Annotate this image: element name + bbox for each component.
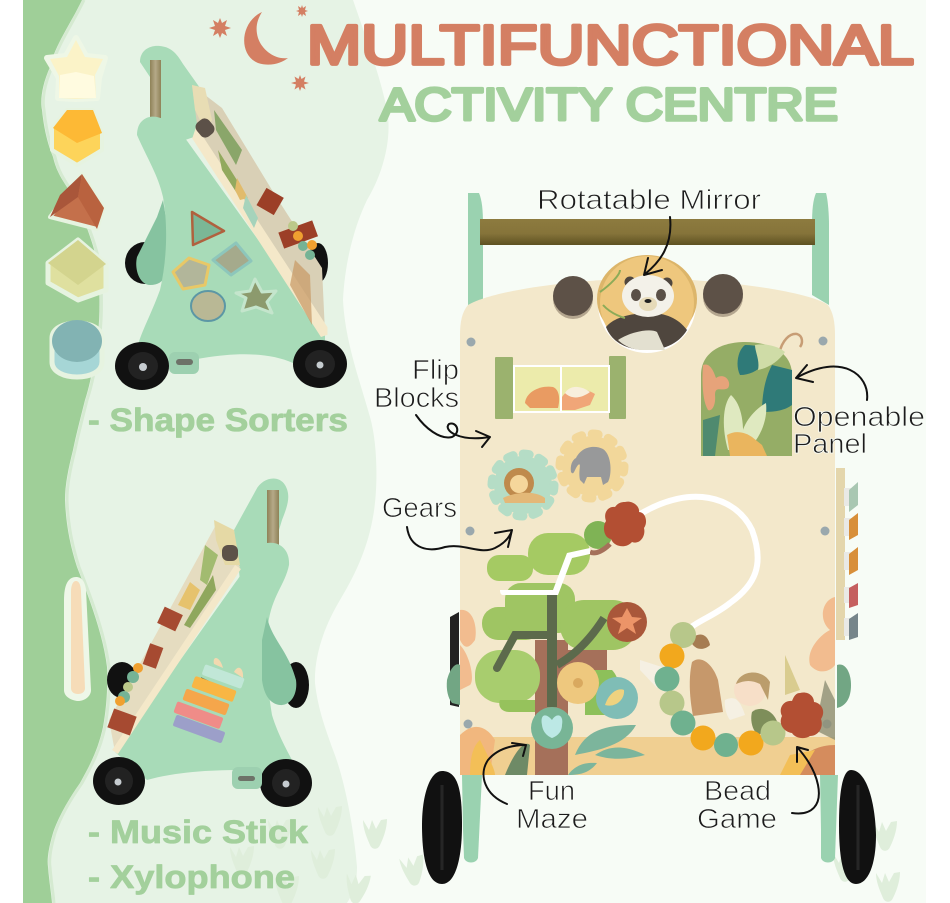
clasp	[169, 352, 199, 374]
background blob: pale green wave	[23, 0, 389, 903]
mirror knobs	[553, 274, 743, 319]
front wheels	[422, 770, 876, 884]
label: Bead Game	[697, 775, 777, 834]
gears	[492, 434, 624, 516]
rear leg	[136, 200, 168, 285]
label: Shape Sorters: - Shape Sorters	[88, 402, 348, 438]
toys on board	[214, 520, 240, 565]
clasp	[232, 767, 262, 789]
handle bar	[150, 60, 161, 118]
arrow: to gears	[407, 527, 512, 550]
arrow: to openable panel	[796, 365, 867, 400]
label: Fun Maze	[516, 775, 588, 834]
label: Bead Game: Game	[697, 803, 777, 834]
main frame	[115, 543, 293, 780]
label: Openable Panel: Panel	[793, 428, 867, 459]
sorter hole: square	[213, 243, 251, 275]
main frame	[137, 117, 325, 363]
board	[460, 278, 835, 775]
label: Gears: Gears	[382, 492, 457, 523]
bead game flower blocks	[604, 502, 823, 738]
screws	[464, 336, 832, 728]
label: Music Stick: - Music Stick	[88, 814, 308, 850]
icon: music stick	[64, 577, 91, 701]
label: Openable Panel: Openable	[793, 401, 925, 432]
label: Fun Maze: Maze	[516, 803, 588, 834]
footprints decoration	[230, 806, 900, 903]
title: Activity Centre: ACTIVITY CENTRE	[380, 79, 838, 130]
arrow: to flip blocks	[416, 415, 490, 447]
label: Flip Blocks	[374, 354, 459, 413]
bead game wire	[642, 497, 758, 628]
maze trees	[475, 521, 637, 775]
sorter hole: circle	[191, 291, 225, 321]
openable panel	[701, 334, 802, 456]
bead game beads	[654, 622, 786, 757]
leaves bottom	[568, 725, 645, 775]
label: Flip Blocks: Blocks	[374, 382, 459, 413]
xylophone	[173, 658, 245, 744]
icon: triangle block	[50, 174, 104, 229]
arrow: to mirror	[644, 217, 670, 275]
handle posts	[468, 193, 483, 310]
label: Xylophone: - Xylophone	[88, 859, 295, 895]
back legs	[450, 612, 459, 707]
label: Bead Game: Bead	[704, 775, 771, 806]
flip blocks	[495, 356, 626, 419]
icon: cylinder block	[52, 320, 102, 377]
scenery ground	[460, 737, 835, 775]
icon: pentagon block	[52, 110, 102, 165]
front view of activity walker	[422, 193, 876, 884]
board	[109, 523, 240, 752]
icon: cube block	[48, 240, 106, 300]
board	[192, 85, 325, 333]
front wheels	[115, 340, 347, 390]
maze discs	[531, 602, 647, 749]
sorter hole: star	[236, 279, 276, 313]
background wave: green strip	[23, 0, 107, 903]
label: Rotatable Mirror: Rotatable Mirror	[537, 184, 761, 215]
label: Openable Panel	[793, 401, 925, 459]
upper frame	[234, 479, 288, 580]
icon: star block	[47, 38, 105, 99]
upper frame	[140, 46, 200, 140]
rotatable mirror panda	[597, 255, 697, 353]
label: Flip Blocks: Flip	[412, 354, 459, 385]
toys on board	[192, 85, 212, 130]
arrow: to bead game	[792, 747, 819, 813]
rear wheels	[107, 662, 309, 708]
label: Fun Maze: Fun	[528, 775, 575, 806]
front legs	[462, 775, 482, 862]
maze slot	[497, 548, 604, 707]
handle bar	[480, 219, 815, 245]
rear wheels	[125, 242, 328, 284]
side view of walker with shape sorters	[115, 46, 347, 390]
side view of walker with xylophone	[93, 479, 312, 807]
handle bar	[267, 490, 279, 545]
sorter hole: triangle	[192, 212, 224, 245]
icon: moon and stars	[209, 5, 309, 91]
side toy strip	[836, 468, 858, 640]
sorter hole: pentagon	[173, 258, 209, 289]
bead game kids	[640, 635, 835, 740]
arrow: to fun maze	[484, 743, 526, 804]
title: Multifunctional: MULTIFUNCTIONAL	[307, 13, 914, 76]
front wheels	[93, 757, 312, 807]
